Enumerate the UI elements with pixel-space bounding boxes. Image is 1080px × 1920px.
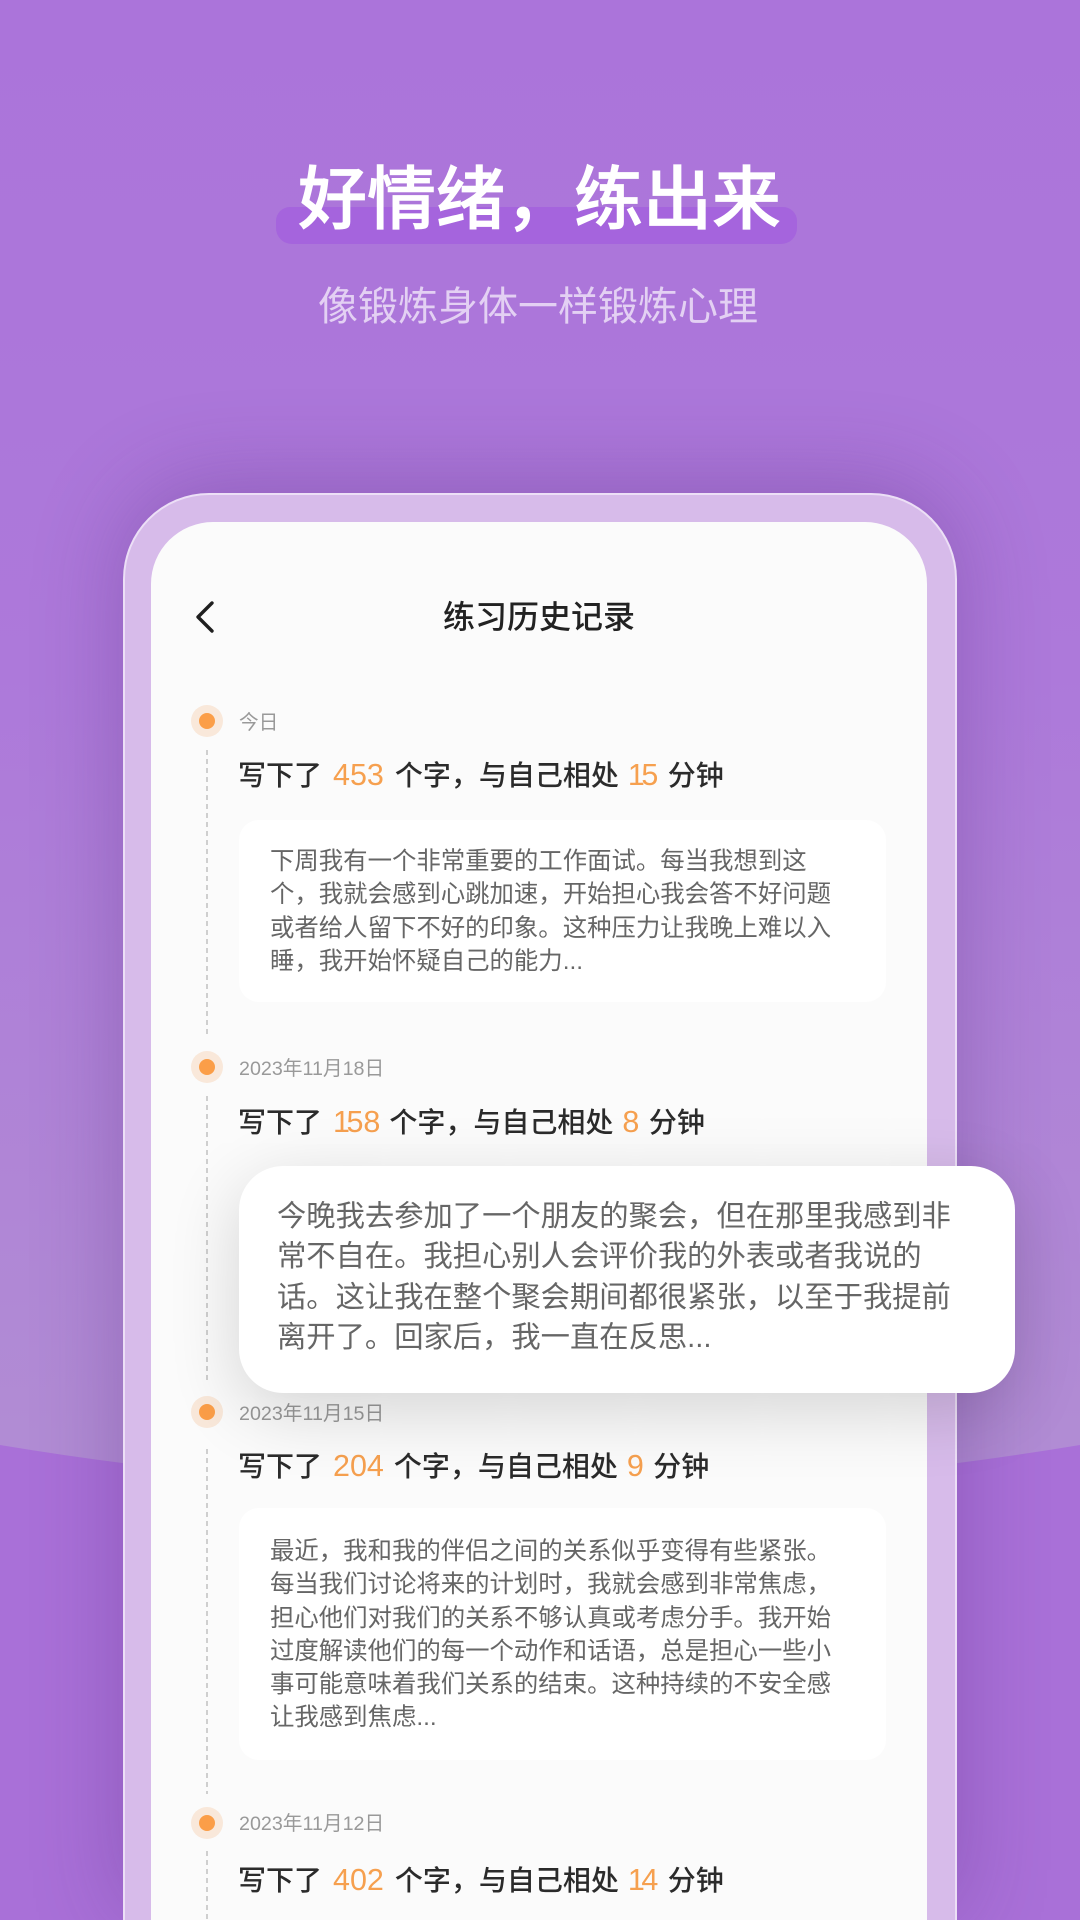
entry 3 text [270, 1538, 831, 1731]
entry 2 date: 2023年11月18日 [239, 1058, 384, 1080]
entry 1 date: 今日 [239, 712, 278, 734]
subtitle: 像锻炼身体一样锻炼心理 [318, 285, 758, 329]
entry 2 timeline dot [191, 1051, 223, 1083]
entry 3 text: 事可能意味着我们关系的结束。这种持续的不安全感 [270, 1671, 831, 1698]
title text: 好情绪，练出来 [298, 161, 781, 238]
entry 3 text: 最近，我和我的伴侣之间的关系似乎变得有些紧张。 [270, 1538, 831, 1565]
entry 2 timeline line [206, 1096, 208, 1382]
entry 4 summary: 写下了 402 个字，与自己相处 14 分钟 [238, 1863, 724, 1897]
entry 3 text: 过度解读他们的每一个动作和话语，总是担心一些小 [270, 1638, 831, 1665]
entry 1 text [270, 848, 831, 975]
entry 1 text: 或者给人留下不好的印象。这种压力让我晚上难以入 [270, 915, 831, 942]
entry 3 summary: 写下了 204 个字，与自己相处 9 分钟 [238, 1449, 709, 1483]
entry 3 text: 担心他们对我们的关系不够认真或考虑分手。我开始 [270, 1605, 831, 1632]
screen title: 练习历史记录 [443, 599, 635, 635]
entry 1 text: 睡，我开始怀疑自己的能力... [270, 948, 583, 975]
entry 1 timeline line [206, 750, 208, 1035]
entry 1 card [239, 820, 886, 1002]
floating card text [277, 1200, 951, 1354]
title highlight bar [276, 207, 797, 244]
entry 4 timeline line [206, 1851, 208, 1920]
entry 4 date: 2023年11月12日 [239, 1813, 384, 1835]
phone screen [151, 522, 927, 1920]
floating card text: 话。这让我在整个聚会期间都很紧张，以至于我提前 [277, 1281, 951, 1314]
entry 4 timeline dot [191, 1807, 223, 1839]
back icon [196, 601, 214, 633]
entry 3 text: 每当我们讨论将来的计划时，我就会感到非常焦虑， [270, 1571, 831, 1598]
title [276, 161, 797, 244]
entry 1 timeline dot [191, 705, 223, 737]
floating card text: 今晚我去参加了一个朋友的聚会，但在那里我感到非 [277, 1200, 951, 1233]
entry 3 card [239, 1508, 886, 1760]
floating card text: 离开了。回家后，我一直在反思... [277, 1321, 712, 1354]
entry 2 summary: 写下了 158 个字，与自己相处 8 分钟 [238, 1105, 705, 1139]
entry 3 timeline line [206, 1449, 208, 1794]
entry 3 timeline dot [191, 1396, 223, 1428]
entry 1 text: 个，我就会感到心跳加速，开始担心我会答不好问题 [270, 881, 831, 908]
floating card text: 常不自在。我担心别人会评价我的外表或者我说的 [277, 1240, 922, 1273]
entry 3 text: 让我感到焦虑... [270, 1704, 437, 1731]
entry 1 text: 下周我有一个非常重要的工作面试。每当我想到这 [270, 848, 807, 875]
floating card: entry 2 text [239, 1166, 1015, 1393]
phone frame [123, 493, 957, 1920]
entry 3 date: 2023年11月15日 [239, 1403, 384, 1425]
entry 1 summary: 写下了 453 个字，与自己相处 15 分钟 [238, 758, 724, 792]
